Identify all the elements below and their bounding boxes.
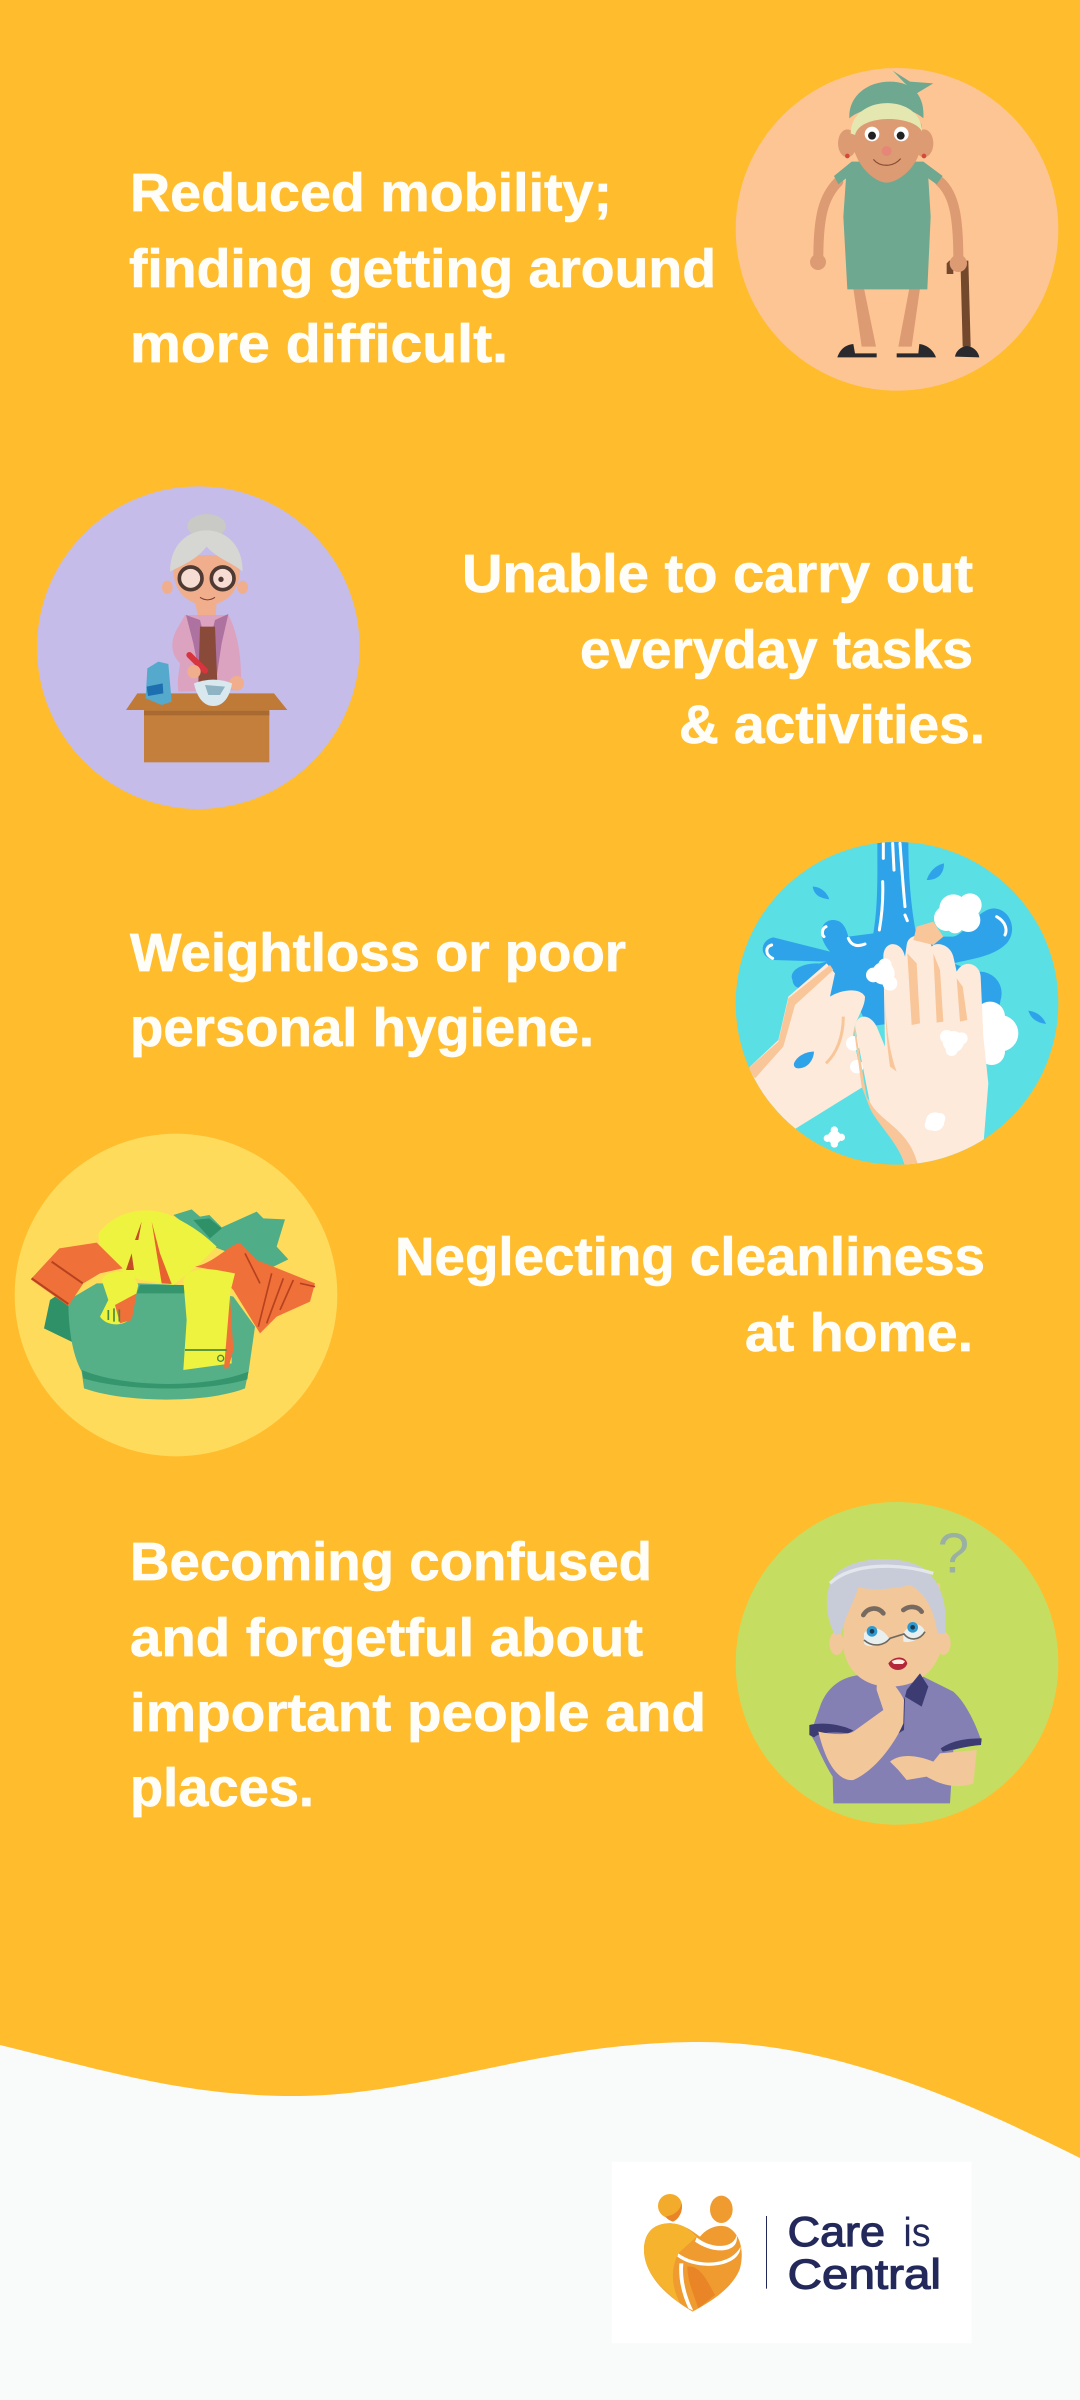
text: confused and forgetful: places. bbox=[130, 1758, 314, 1818]
text: confused and forgetful: and forgetful about bbox=[130, 1608, 643, 1668]
text: reduced mobility: Reduced mobility; bbox=[130, 163, 612, 223]
soap foam behind bbox=[846, 1002, 1018, 1073]
logo panel: Care is Central: Central bbox=[788, 2251, 941, 2297]
text: weightloss and hygiene: personal hygiene. bbox=[130, 998, 594, 1058]
logo panel: Care is Central bbox=[644, 2194, 941, 2312]
illustration: grandmother baking at a table bbox=[37, 486, 360, 809]
logo heart figures bbox=[644, 2194, 742, 2312]
text: confused and forgetful bbox=[130, 1532, 706, 1818]
illustration: hands washing under running water bbox=[736, 842, 1058, 1165]
text: confused and forgetful: Becoming confused bbox=[130, 1532, 652, 1592]
text: everyday tasks: Unable to carry out bbox=[462, 544, 973, 604]
text: neglecting cleanliness: Neglecting cleanliness bbox=[395, 1227, 985, 1287]
text: neglecting cleanliness bbox=[395, 1227, 985, 1363]
water stream and splash bbox=[763, 840, 1046, 1027]
text: weightloss and hygiene bbox=[130, 923, 626, 1058]
illustration: elderly woman with walking cane bbox=[736, 68, 1058, 391]
text: reduced mobility: more difficult. bbox=[130, 314, 508, 374]
left hand bbox=[740, 963, 865, 1130]
text: weightloss and hygiene: Weightloss or poor bbox=[130, 923, 626, 983]
text: neglecting cleanliness: at home. bbox=[745, 1303, 973, 1363]
text: everyday tasks: & activities. bbox=[679, 695, 985, 755]
text: confused and forgetful: important people and bbox=[130, 1683, 706, 1743]
right hand bbox=[855, 936, 988, 1167]
question mark: ? bbox=[938, 1523, 969, 1586]
logo panel: Care is Central: Care bbox=[788, 2209, 885, 2255]
text: everyday tasks bbox=[462, 544, 985, 755]
text: reduced mobility bbox=[129, 163, 716, 374]
illustration: overflowing laundry basket bbox=[14, 1134, 338, 1456]
illustration: confused elderly man with question mark bbox=[736, 1502, 1058, 1825]
logo panel: Care is Central: is bbox=[903, 2209, 931, 2255]
foam clusters bbox=[824, 893, 982, 1148]
text: reduced mobility: finding getting around bbox=[129, 239, 716, 299]
text: everyday tasks: everyday tasks bbox=[580, 620, 973, 680]
